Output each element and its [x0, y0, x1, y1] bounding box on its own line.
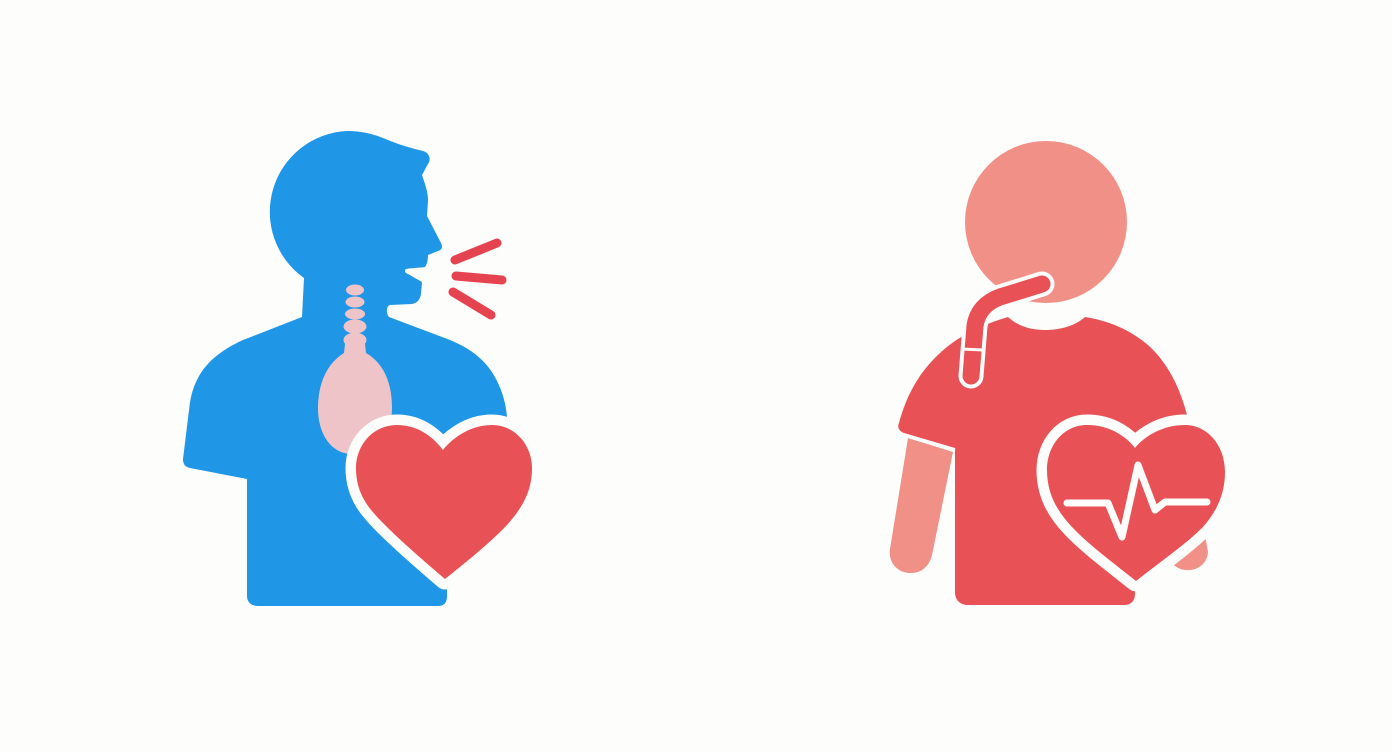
salmon right hand [1170, 500, 1208, 570]
red heart with white outline [356, 425, 532, 579]
tube red fill [971, 284, 1042, 376]
tube divider [961, 349, 983, 350]
figure: speaking person with airway and heart [183, 131, 532, 606]
tube white outline [971, 284, 1042, 376]
feeding tube [971, 284, 1042, 376]
figure: person with feeding tube and heartbeat [890, 141, 1225, 605]
salmon head [965, 141, 1127, 303]
heartbeat line [1067, 465, 1207, 537]
white gap below arm [906, 436, 955, 450]
blue body silhouette [183, 131, 507, 606]
sound lines from mouth [453, 243, 502, 315]
salmon left arm [890, 438, 953, 573]
red shirt [898, 317, 1187, 605]
airway: trachea and lung [318, 284, 392, 454]
heart with pulse [1047, 425, 1225, 581]
